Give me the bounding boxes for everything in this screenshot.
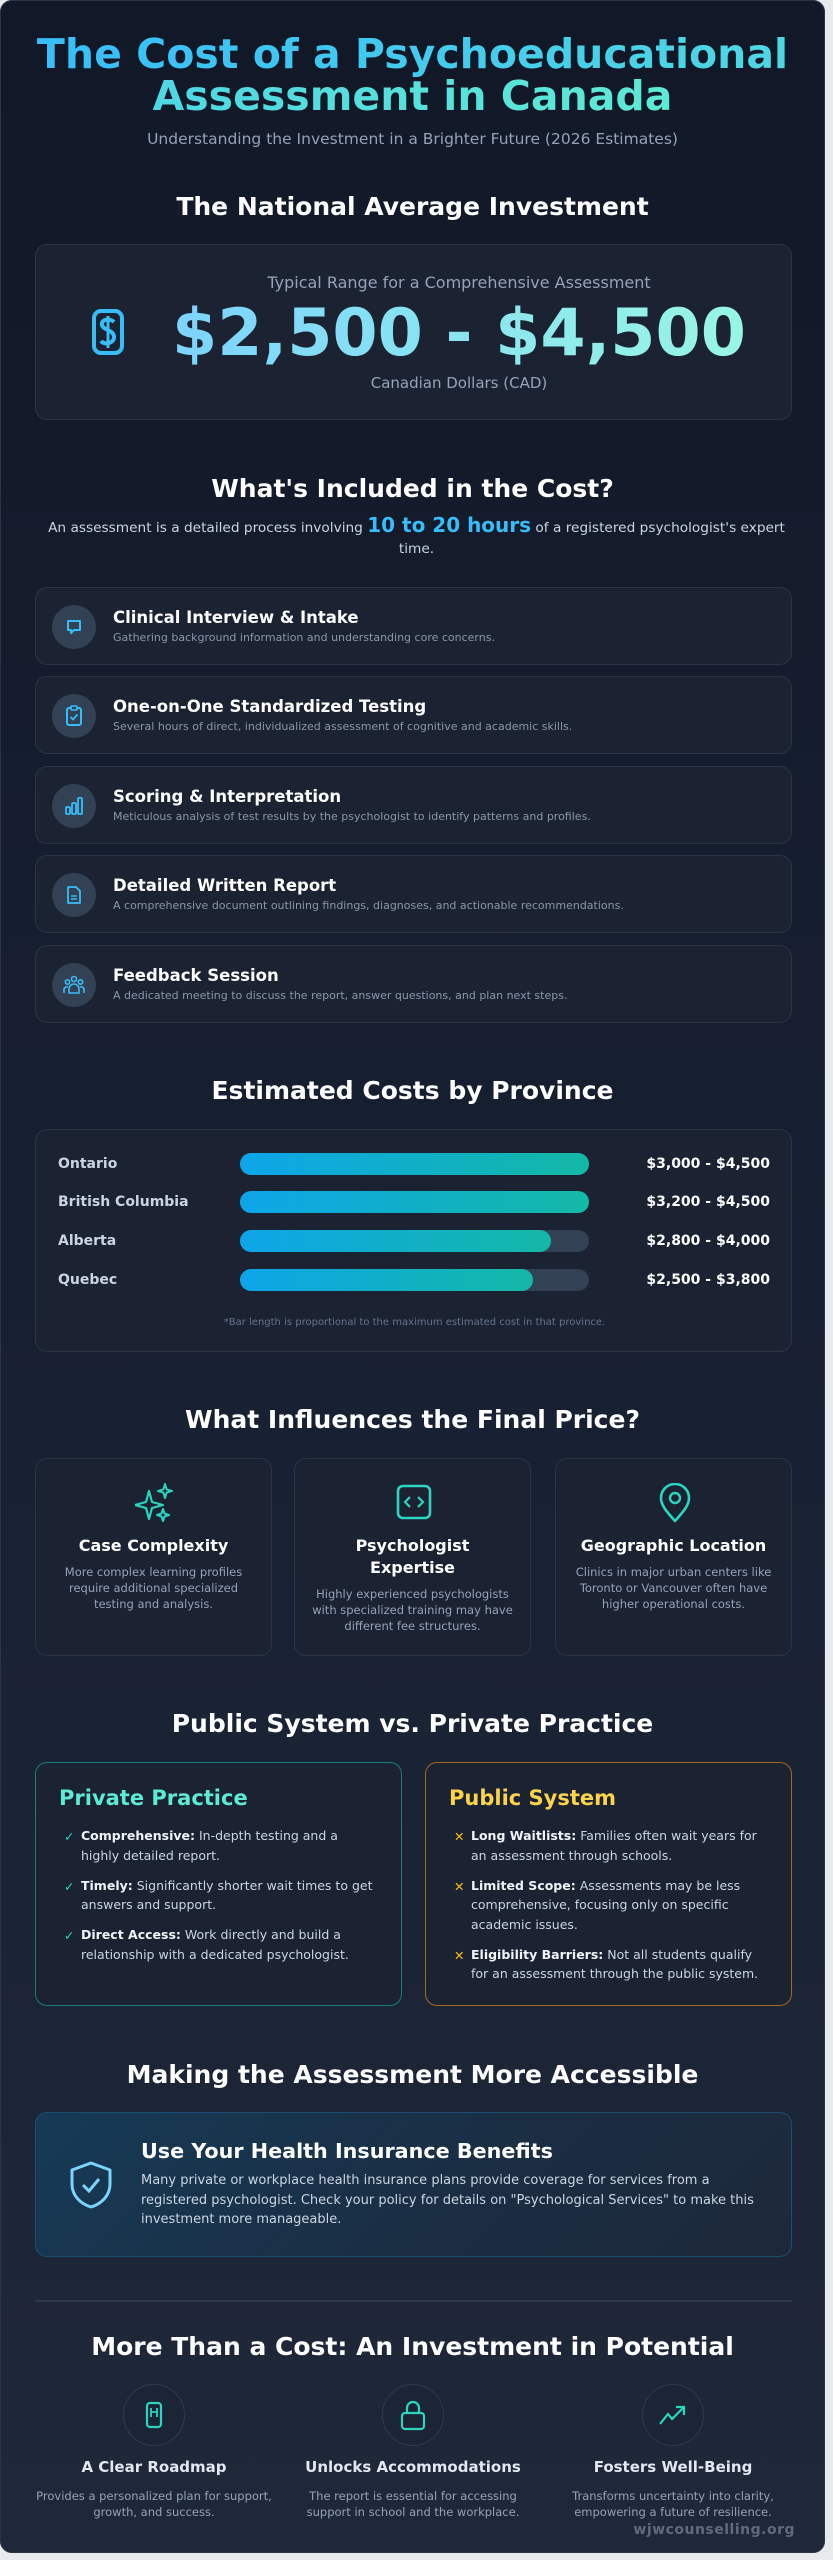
icon: sparkles: [135, 1483, 173, 1522]
panel title: Psychologist: [356, 1536, 469, 1555]
heading: investment: More Than a Cost: An Investment in Potential: [91, 2332, 734, 2361]
panel desc: More complex learning profiles require additional specialized testing and analysis.: [65, 1565, 242, 1611]
benefit: well-being: [572, 2458, 774, 2519]
item title: Detailed Written Report: [113, 876, 336, 895]
item desc: Several hours of direct, individualized assessment of cognitive and academic skills.: [113, 720, 572, 733]
icon: lock: [382, 2384, 444, 2446]
heading: accessible: Making the Assessment More Accessible: [127, 2060, 698, 2089]
panel title: Expertise: [370, 1558, 455, 1577]
list: private benefits: [64, 1828, 372, 1962]
panel title: [356, 1536, 470, 1577]
item desc: A comprehensive document outlining findings, diagnoses, and actionable recommendations.: [113, 899, 624, 912]
list: public drawbacks: ✕: [454, 1948, 464, 1962]
row: British Columbia: British Columbia: [58, 1194, 189, 1210]
intro text: An assessment is a detailed process involving 10 to 20 hours of a registered psychologist's expert time.: [48, 513, 785, 557]
item desc: Meticulous analysis of test results by the psychologist to identify patterns and profiles.: [113, 810, 591, 823]
callout: insurance: [35, 2112, 792, 2257]
icon: map pin: [660, 1483, 690, 1522]
icon: shield: [70, 2162, 112, 2208]
list: public drawbacks: ✕: [454, 1878, 464, 1894]
row: Quebec: Quebec: [58, 1272, 117, 1288]
footnote: *Bar length is proportional to the maximum estimated cost in that province.: [224, 1317, 605, 1328]
row: Quebec: $2,500 - $3,800: [646, 1272, 770, 1288]
item: report: [35, 855, 792, 933]
heading: included: What's Included in the Cost?: [211, 474, 614, 503]
panel: geographic location: [555, 1458, 792, 1656]
panel: case complexity: [35, 1458, 272, 1656]
panel title: Geographic Location: [581, 1536, 766, 1555]
benefit: well-being: Transforms uncertainty into clarity, empowering a future of resilience.: [572, 2489, 774, 2519]
panel desc: Highly experienced psychologists with specialized training may have different fee structures.: [312, 1587, 513, 1633]
list: public drawbacks: Eligibility Barriers: Not all students qualify for an assessment through the public system.: [471, 1946, 758, 1981]
panel title: Public System: [449, 1786, 616, 1810]
item title: Scoring & Interpretation: [113, 787, 341, 806]
list: private benefits: ✓: [64, 1829, 74, 1844]
label: Typical Range for a Comprehensive Assessment: [267, 273, 651, 292]
row: Quebec: [58, 1269, 770, 1291]
row: Alberta: $2,800 - $4,000: [646, 1233, 770, 1249]
list: public drawbacks: [454, 1828, 758, 1981]
callout title: Use Your Health Insurance Benefits: [141, 2139, 553, 2163]
item: clinical interview: [35, 587, 792, 665]
row: British Columbia: [58, 1191, 770, 1213]
list: private benefits: ✓: [64, 1928, 74, 1943]
list: public drawbacks: ✕: [454, 1829, 464, 1844]
price: $2,500 - $4,500: [172, 296, 746, 371]
row: British Columbia: $3,200 - $4,500: [646, 1194, 770, 1210]
icon: clipboard: [52, 694, 96, 738]
heading: influences: What Influences the Final Price?: [185, 1405, 640, 1434]
callout text: Many private or workplace health insurance plans provide coverage for services from a registered psychologist. Check your policy for details on "Psychological Services" to make this investment more manageable.: [141, 2173, 754, 2227]
item: feedback: [35, 945, 792, 1023]
title: The Cost of a Psychoeducational: [37, 30, 788, 78]
row: Ontario: [58, 1153, 770, 1175]
panel: public system: [425, 1762, 792, 2006]
benefit: accommodations: Unlocks Accommodations: [305, 2458, 521, 2476]
row: Alberta: [58, 1230, 770, 1252]
item title: Clinical Interview & Intake: [113, 608, 359, 627]
icon: chart: [52, 784, 96, 828]
heading: national average: The National Average Investment: [176, 192, 649, 221]
panel desc: Clinics in major urban centers like Toronto or Vancouver often have higher operational costs.: [576, 1565, 771, 1611]
panel title: Private Practice: [59, 1786, 248, 1810]
panel: psychologist expertise: [294, 1458, 531, 1656]
icon: money: [92, 309, 124, 355]
item title: One-on-One Standardized Testing: [113, 697, 426, 716]
title: Assessment in Canada: [153, 72, 672, 120]
list: private benefits: Direct Access: Work directly and build a relationship with a dedicated psychologist.: [81, 1927, 349, 1962]
benefit: roadmap: A Clear Roadmap: [81, 2458, 227, 2476]
subtitle: Understanding the Investment in a Brighter Future (2026 Estimates): [147, 130, 678, 148]
icon: roadmap: [123, 2384, 185, 2446]
item: scoring: [35, 766, 792, 844]
icon: document: [52, 873, 96, 917]
list: private benefits: Timely: Significantly shorter wait times to get answers and support.: [81, 1878, 372, 1912]
heading: public vs private: Public System vs. Private Practice: [172, 1709, 653, 1738]
icon: trend: [642, 2384, 704, 2446]
heading: province: Estimated Costs by Province: [211, 1076, 614, 1105]
currency: Canadian Dollars (CAD): [371, 374, 547, 392]
list: public drawbacks: Limited Scope: Assessments may be less comprehensive, focusing only on specific academic issues.: [471, 1878, 740, 1932]
item title: Feedback Session: [113, 966, 279, 985]
benefit: roadmap: [36, 2458, 272, 2519]
benefit: roadmap: Provides a personalized plan for support, growth, and success.: [36, 2489, 272, 2519]
panel: price range: [35, 244, 792, 420]
item desc: Gathering background information and understanding core concerns.: [113, 631, 495, 644]
list: private benefits: Comprehensive: In-depth testing and a highly detailed report.: [81, 1828, 338, 1862]
row: Ontario: Ontario: [58, 1156, 117, 1172]
list: public drawbacks: Long Waitlists: Families often wait years for an assessment through schools.: [471, 1828, 757, 1862]
panel title: Case Complexity: [79, 1536, 228, 1555]
benefit: well-being: Fosters Well-Being: [594, 2458, 752, 2476]
title: [37, 30, 788, 120]
bar chart: province costs: [35, 1129, 792, 1352]
row: Ontario: $3,000 - $4,500: [646, 1156, 770, 1172]
list: private benefits: ✓: [64, 1878, 74, 1894]
benefit: accommodations: [305, 2458, 521, 2519]
icon: chat: [52, 605, 96, 649]
item: testing: [35, 676, 792, 754]
icon: people: [52, 963, 96, 1007]
row: Alberta: Alberta: [58, 1233, 116, 1249]
watermark: wjwcounselling.org: [633, 2522, 795, 2538]
icon: code box: [396, 1484, 432, 1520]
item desc: A dedicated meeting to discuss the report, answer questions, and plan next steps.: [113, 989, 567, 1002]
benefit: accommodations: The report is essential for accessing support in school and the workplace.: [307, 2489, 519, 2519]
panel: private practice: [35, 1762, 402, 2006]
